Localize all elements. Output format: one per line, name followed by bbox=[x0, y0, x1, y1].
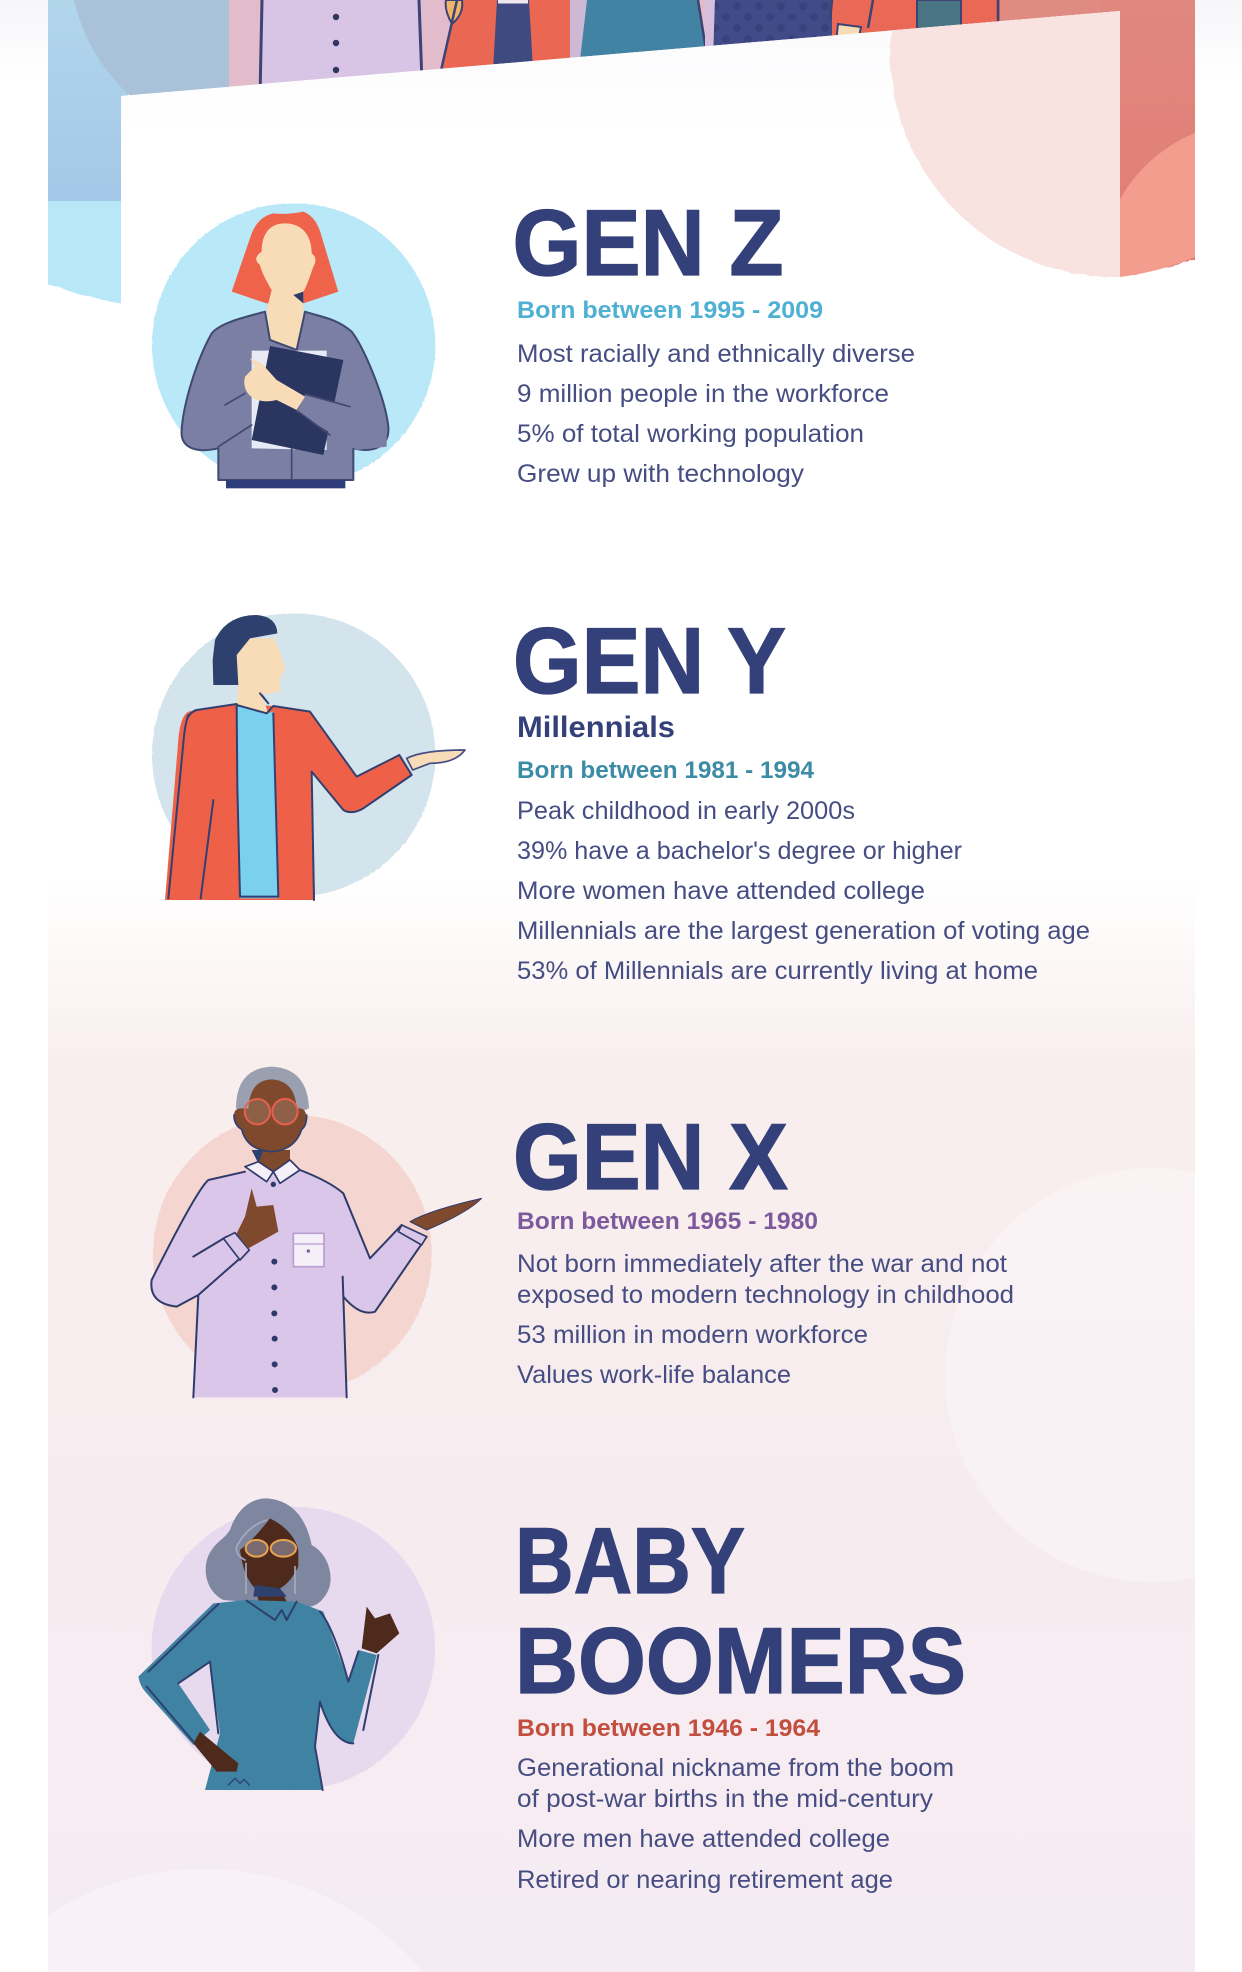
white panel top bbox=[121, 11, 1120, 306]
facts bbox=[517, 1754, 954, 1894]
red jacket and tie figure bbox=[440, 0, 570, 69]
subheading: Millennials: Millennials bbox=[517, 711, 675, 744]
facts bbox=[517, 1250, 1014, 1389]
section: Gen Z bbox=[152, 190, 915, 488]
facts: exposed to modern technology in childhood bbox=[517, 1281, 1014, 1309]
pink backdrop behind figures bbox=[229, 0, 705, 87]
lavender shirt bbox=[258, 0, 424, 84]
right red band bbox=[1104, 0, 1195, 279]
facts: 39% have a bachelor's degree or higher bbox=[517, 837, 962, 865]
facts: Not born immediately after the war and not bbox=[517, 1250, 1007, 1278]
facts: 53% of Millennials are currently living at home bbox=[517, 957, 1038, 985]
facts bbox=[517, 797, 1090, 985]
facts bbox=[517, 340, 915, 488]
heading: GEN Y: GEN Y bbox=[513, 608, 786, 713]
background circle: bottom left bbox=[48, 1869, 423, 1972]
illustration: Baby Boomer woman with thumbs up bbox=[138, 1498, 435, 1790]
illustration: Gen Y man with open hand bbox=[152, 613, 465, 900]
illustration: Gen X man with thumbs up bbox=[151, 1067, 482, 1397]
section: Baby Boomers bbox=[138, 1498, 966, 1894]
facts: Millennials are the largest generation of voting age bbox=[517, 917, 1090, 945]
facts: 5% of total working population bbox=[517, 420, 864, 448]
illustration: Gen Z woman with folder bbox=[152, 203, 435, 488]
section: Gen X bbox=[151, 1067, 1014, 1397]
birth years: Born between 1946 - 1964 bbox=[517, 1715, 821, 1742]
top margin fade bbox=[0, 0, 1242, 80]
heading: GEN X: GEN X bbox=[513, 1104, 788, 1209]
facts: 53 million in modern workforce bbox=[517, 1321, 868, 1349]
heading: BABY BOOMERS: BOOMERS bbox=[515, 1608, 966, 1713]
heading: BABY BOOMERS: BABY bbox=[515, 1508, 745, 1613]
birth years: Born between 1981 - 1994 bbox=[517, 757, 815, 784]
gray-blue backdrop circle bbox=[74, 0, 230, 100]
left light blue band bbox=[48, 201, 121, 304]
background circle: middle right bbox=[945, 1168, 1195, 1582]
navy dot pattern bbox=[714, 2, 829, 43]
content column background bbox=[48, 880, 1195, 1972]
facts: Values work-life balance bbox=[517, 1361, 791, 1389]
facts: Most racially and ethnically diverse bbox=[517, 340, 915, 368]
heading: BABY BOOMERS bbox=[515, 1508, 966, 1713]
pink backdrop on right bbox=[1000, 0, 1100, 21]
teal figure bbox=[580, 0, 706, 60]
facts: of post-war births in the mid-century bbox=[517, 1785, 934, 1813]
facts: 9 million people in the workforce bbox=[517, 380, 889, 408]
facts: More women have attended college bbox=[517, 877, 925, 905]
header panel fade bbox=[121, 11, 1120, 130]
navy dotted figure bbox=[714, 0, 832, 46]
header illustration band bbox=[30, 0, 1225, 306]
left blue band bbox=[48, 0, 128, 201]
heading: GEN Z: GEN Z bbox=[512, 190, 784, 295]
facts: Peak childhood in early 2000s bbox=[517, 797, 855, 825]
lavender sliver bbox=[705, 0, 715, 46]
birth years: Born between 1995 - 2009 bbox=[517, 297, 823, 324]
section: Gen Y bbox=[152, 608, 1090, 985]
birth years: Born between 1965 - 1980 bbox=[517, 1208, 818, 1235]
facts: Generational nickname from the boom bbox=[517, 1754, 954, 1782]
pink circle on panel bbox=[889, 11, 1120, 278]
facts: Grew up with technology bbox=[517, 460, 805, 488]
facts: More men have attended college bbox=[517, 1825, 890, 1853]
facts: Retired or nearing retirement age bbox=[517, 1866, 893, 1894]
red figure with teal shirt bbox=[829, 0, 1000, 36]
lavender gap between figures bbox=[570, 0, 587, 58]
